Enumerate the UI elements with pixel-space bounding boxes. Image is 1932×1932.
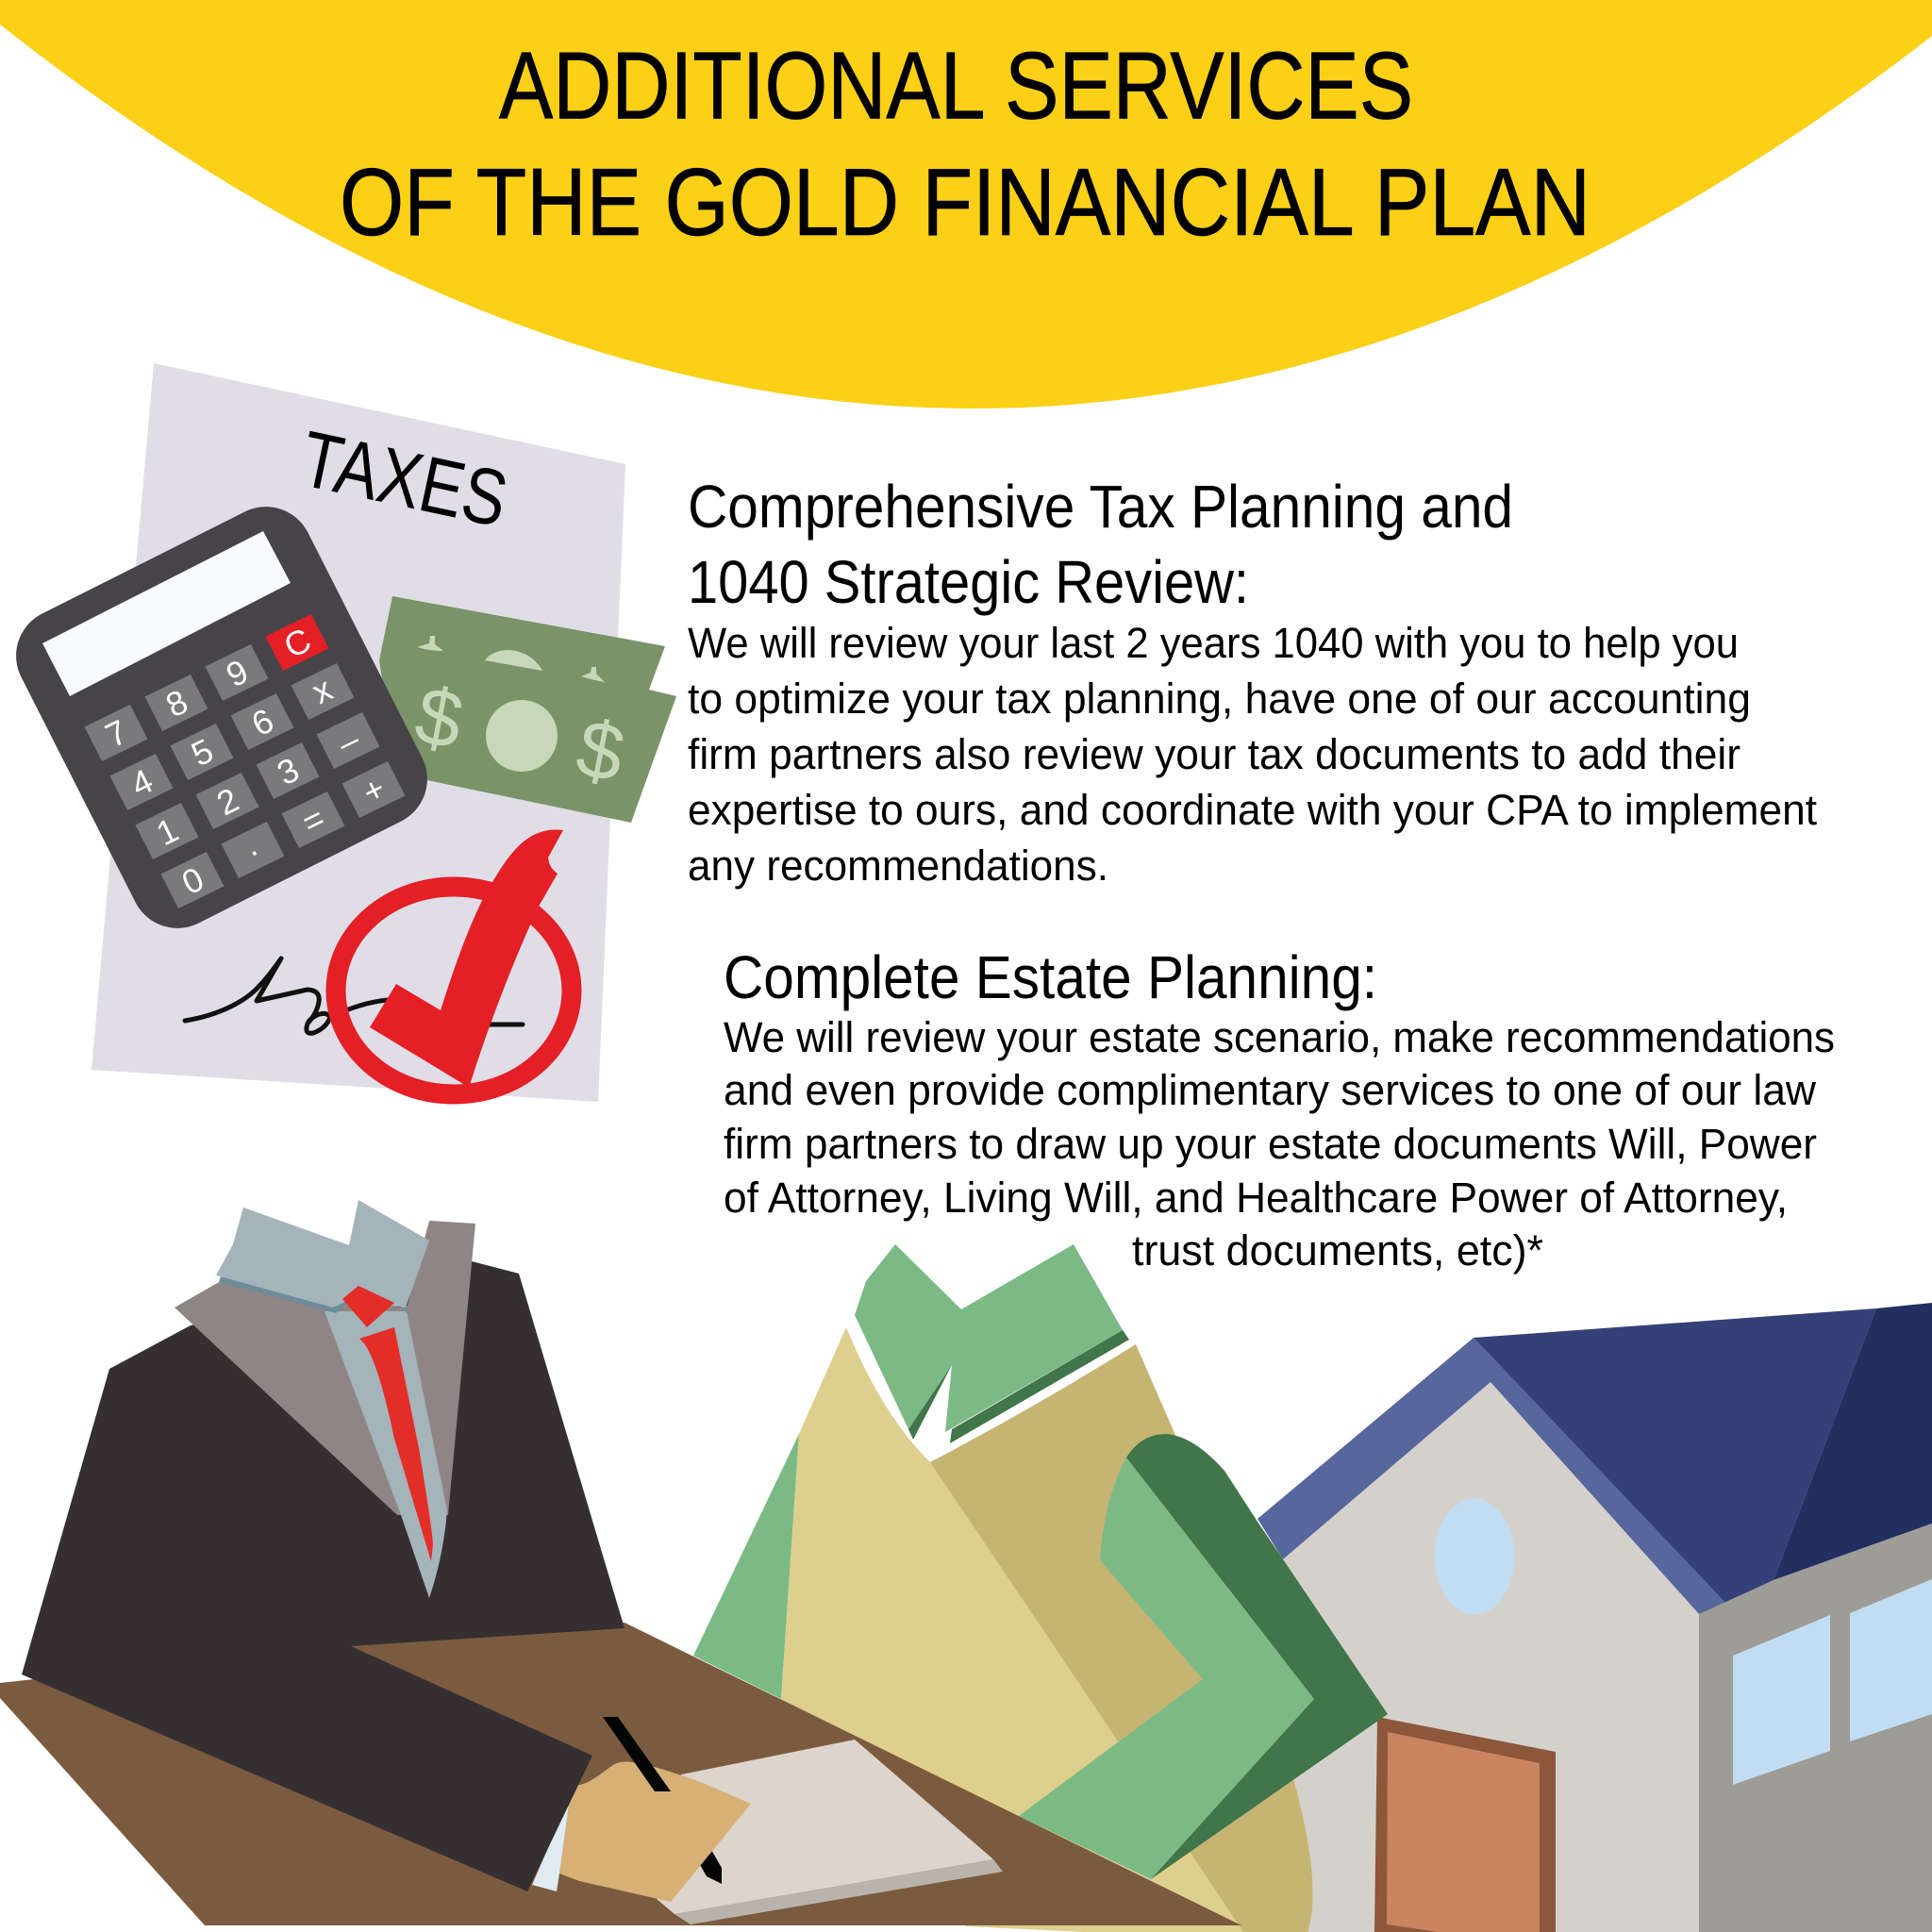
text block: tax planning: [688, 473, 1817, 890]
door: [1374, 1717, 1556, 1932]
heading: tax planning: 1040 Strategic Review:: [688, 548, 1249, 616]
envelope dark side: [930, 1344, 1313, 1932]
windows: [1733, 1579, 1932, 1785]
body: estate planning: [724, 1013, 1835, 1274]
oval window: [1434, 1498, 1515, 1615]
illustration: money envelope: [693, 1244, 1313, 1932]
calculator keys: 3: [271, 750, 305, 792]
body: estate planning: We will review your estate scenario, make recommendations: [724, 1013, 1835, 1061]
heading: estate planning: Complete Estate Planning:: [724, 943, 1377, 1011]
body: tax planning: expertise to ours, and coordinate with your CPA to implement: [688, 786, 1817, 834]
calculator keys: =: [296, 798, 331, 841]
title: ADDITIONAL SERVICES: [499, 34, 1413, 140]
roof shadow: [1774, 1303, 1932, 1580]
body: tax planning: to optimize your tax planning, have one of our accounting: [688, 675, 1751, 723]
lapel: [175, 1221, 475, 1515]
signature: [185, 958, 523, 1033]
shirt front: [325, 1311, 447, 1598]
TAXES label: TAXES: [293, 414, 515, 543]
collar: [216, 1200, 429, 1307]
green back edge: [693, 1434, 799, 1699]
text block: estate planning: [724, 943, 1835, 1274]
body: estate planning: and even provide complimentary services to one of our law: [724, 1066, 1816, 1114]
dollar bills: $: [570, 703, 631, 800]
calculator keys: 9: [220, 652, 254, 694]
heading: tax planning: Comprehensive Tax Planning and: [688, 473, 1513, 541]
calculator keys: 1: [150, 810, 184, 853]
calculator keys: C: [278, 620, 317, 666]
calculator keys: +: [357, 768, 391, 811]
red check mark and circle: [336, 829, 572, 1094]
calculator keys: 4: [125, 761, 158, 804]
yellow header banner: [0, 0, 1932, 408]
title: OF THE GOLD FINANCIAL PLAN: [340, 150, 1591, 256]
dollar bills: [379, 596, 676, 823]
tax paper sheet: [92, 363, 625, 1102]
shirt cuff: [532, 1798, 570, 1891]
calculator keys: [85, 614, 406, 908]
calculator keys: .: [238, 825, 263, 864]
paper on desk: [657, 1740, 1003, 1924]
calculator keys: 7: [99, 712, 133, 755]
calculator keys: 8: [159, 682, 193, 724]
body: tax planning: We will review your last 2 years 1040 with you to help you: [688, 619, 1739, 667]
body: estate planning: of Attorney, Living Will, and Healthcare Power of Attorney,: [724, 1174, 1788, 1222]
illustration: taxes document: [16, 363, 676, 1102]
heading: tax planning: [688, 473, 1513, 616]
collar shadow: [219, 1276, 408, 1313]
pen: [603, 1717, 671, 1791]
illustration: desk: [0, 1623, 1241, 1925]
body: tax planning: firm partners also review your tax documents to add their: [688, 730, 1740, 778]
hand: [559, 1762, 751, 1902]
calculator keys: 0: [175, 859, 209, 902]
illustration: businessman writing: [22, 1200, 1003, 1924]
body: estate planning: firm partners to draw up your estate documents Will, Power: [724, 1120, 1817, 1168]
roof: [1474, 1308, 1876, 1603]
pen tip: [699, 1850, 722, 1884]
calculator keys: 6: [245, 701, 279, 743]
body: estate planning: trust documents, etc)*: [1132, 1226, 1543, 1274]
house wall: [1264, 1382, 1699, 1932]
calculator keys: x: [306, 669, 338, 711]
title: [340, 34, 1591, 256]
calculator keys: –: [331, 720, 365, 762]
roof edge: [1257, 1338, 1725, 1614]
dollar bills: $: [408, 670, 470, 767]
illustration: house: [1257, 1303, 1932, 1932]
envelope light side: [781, 1327, 1243, 1932]
illustration: front banknotes: [1019, 1434, 1388, 1879]
top banknotes: [855, 1244, 1129, 1443]
body: tax planning: [688, 619, 1817, 890]
body: tax planning: any recommendations.: [688, 841, 1108, 890]
calculator: [16, 507, 427, 928]
calculator keys: 2: [210, 780, 244, 823]
garage wall: [1699, 1524, 1932, 1932]
calculator keys: 5: [185, 731, 219, 774]
suit jacket: [22, 1261, 625, 1891]
tie: [342, 1286, 433, 1561]
